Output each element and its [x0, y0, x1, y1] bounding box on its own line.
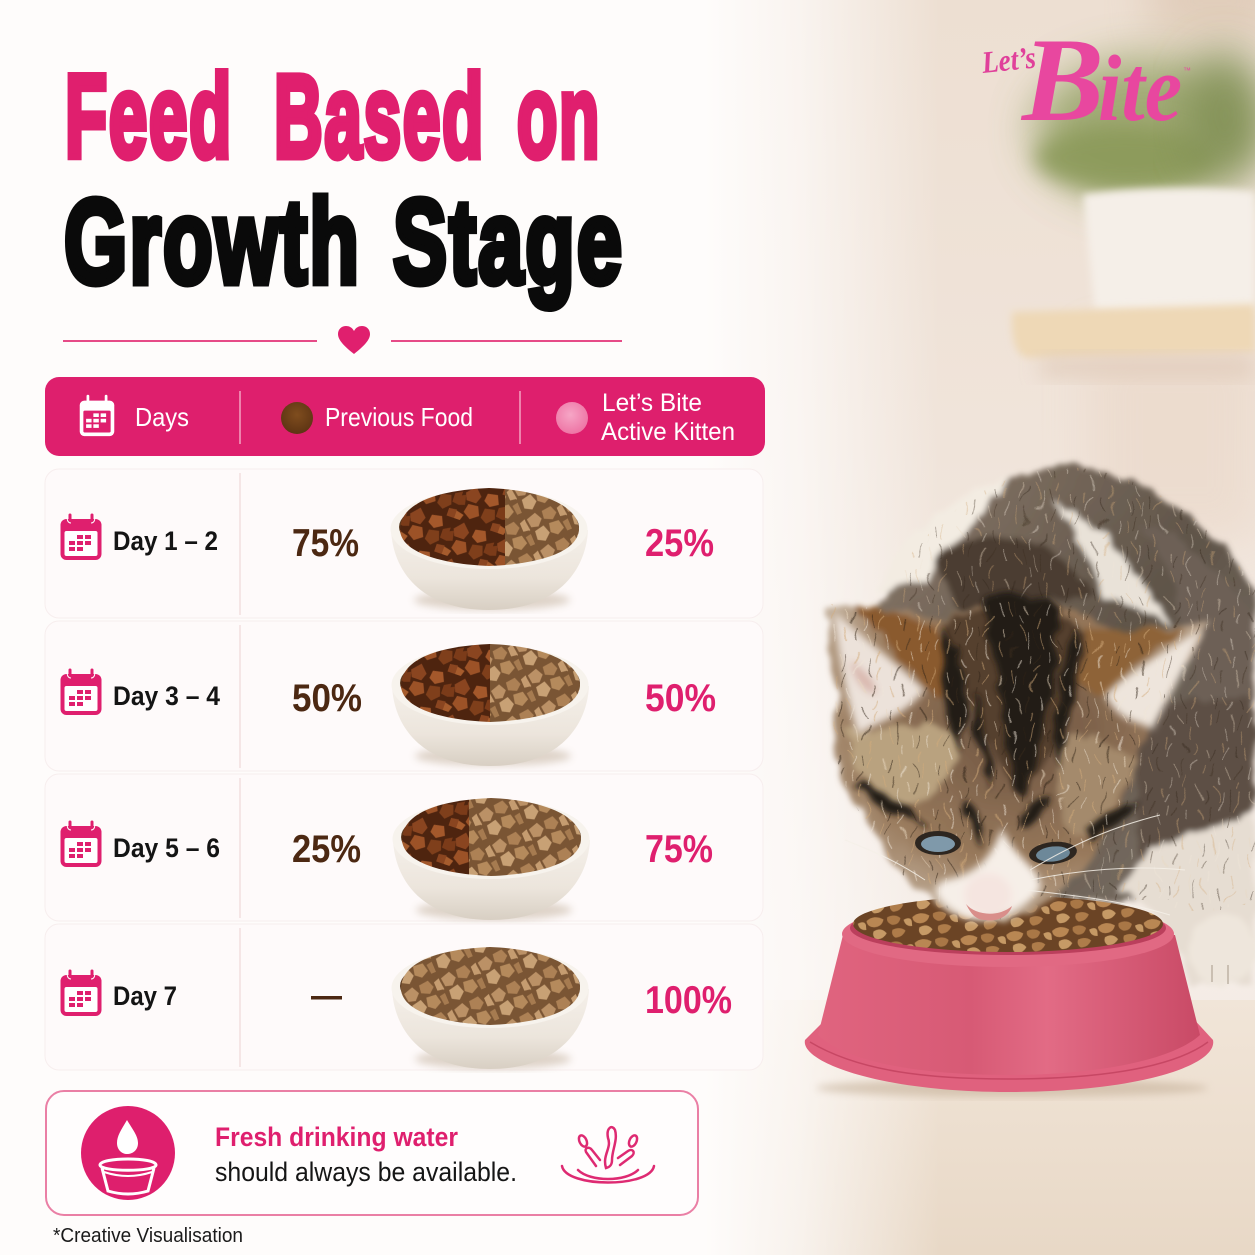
icon: calendar [60, 970, 102, 1016]
title line one: on [517, 51, 601, 183]
logo: Let’s [979, 40, 1037, 80]
nose [966, 904, 1012, 920]
day label: Day 7 [113, 981, 177, 1011]
day label: Day 1 – 2 [113, 526, 218, 556]
icon: lets bite kibble [556, 402, 588, 434]
fur texture [825, 600, 1210, 925]
header: previous food: Previous Food [325, 402, 473, 432]
icon: header calendar [80, 396, 114, 436]
title [64, 51, 624, 309]
plant and shelf [1012, 50, 1255, 378]
icon: calendar [60, 822, 102, 867]
fur patches [858, 605, 960, 700]
eyes [915, 831, 1078, 866]
header: days: Days [135, 402, 189, 432]
day label: Day 5 – 6 [113, 833, 220, 863]
icon: previous food kibble [281, 402, 313, 434]
logo: ite [1098, 37, 1182, 141]
logo: ™ [1183, 66, 1191, 75]
previous food percent: 75% [292, 522, 359, 565]
header: lets bite active kitten: Let’s Bite [602, 389, 702, 417]
kibble in bowl [853, 896, 1163, 952]
day label: Day 3 – 4 [113, 681, 220, 711]
left fade [0, 0, 940, 1255]
row: day 3-4 [45, 621, 763, 771]
icon: calendar [60, 514, 102, 560]
bowl flange [805, 1015, 1213, 1092]
previous food percent: 25% [292, 828, 361, 871]
heart divider [63, 326, 622, 354]
kitten body [870, 467, 1255, 986]
water callout [46, 1091, 698, 1215]
lets bite percent: 25% [645, 522, 714, 565]
bowl: 25/75 mix [392, 794, 590, 920]
row: day 7 [45, 924, 763, 1070]
row: day 5-6 [45, 774, 763, 921]
title line two: Growth [64, 175, 361, 309]
footnote: *Creative Visualisation [53, 1225, 243, 1247]
title line one [65, 51, 601, 183]
icon: splash [562, 1127, 654, 1182]
whiskers [845, 815, 1185, 915]
lets bite percent: 100% [645, 979, 732, 1022]
lets bite percent: 75% [645, 828, 713, 871]
logo [979, 13, 1191, 146]
previous food dash [311, 996, 342, 1000]
callout heading: Fresh drinking water [215, 1122, 458, 1152]
title line one: Based [274, 51, 485, 183]
pink bowl [805, 896, 1213, 1097]
bowl: 50/50 mix [392, 640, 589, 766]
forehead stripes [855, 594, 1140, 845]
bowl body [818, 935, 1200, 1075]
previous food percent: 50% [292, 677, 362, 720]
callout text: should always be available. [215, 1157, 517, 1187]
kitten head [825, 594, 1210, 925]
row: day 1-2 [45, 469, 763, 618]
bowl: 75/25 mix [390, 484, 588, 610]
bowl: 100 percent [392, 943, 589, 1069]
title line one: Feed [65, 51, 233, 183]
bowl rim [842, 901, 1174, 967]
icon: water bowl [81, 1106, 175, 1200]
header: lets bite active kitten: Active Kitten [601, 418, 735, 446]
table header [45, 377, 765, 456]
lets bite percent: 50% [645, 677, 716, 720]
muzzle [936, 828, 1041, 920]
icon: calendar [60, 670, 102, 715]
ears [834, 612, 1203, 735]
title line two: Stage [393, 175, 624, 309]
logo: B [1020, 13, 1104, 146]
